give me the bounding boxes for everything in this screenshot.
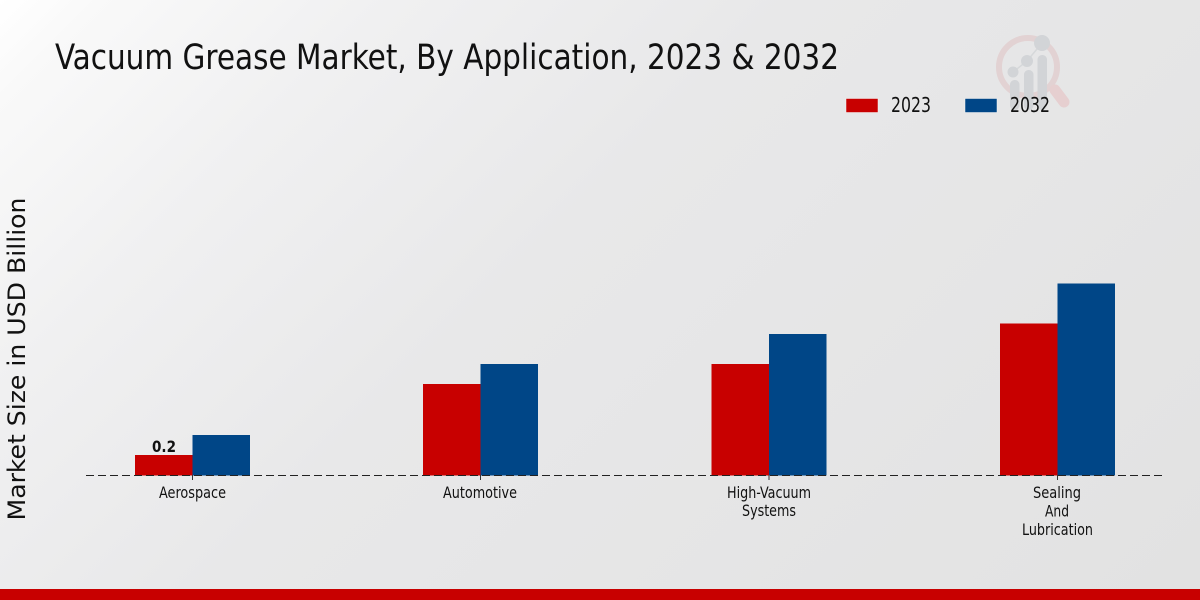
bars: Sealing And Lubrication [1000,284,1115,476]
value label: 0.2 [152,437,176,456]
legend item: 2032: 2032 [1010,93,1050,117]
bars: Automotive [423,364,538,476]
legend item: 2023 [846,93,931,117]
y-axis title: Market Size in USD Billion [3,198,31,520]
watermark logo [999,35,1064,110]
category label: High-Vacuum Systems: Systems [742,501,796,520]
bars: High-Vacuum Systems [712,334,826,476]
category label: Sealing And Lubrication [1022,483,1093,539]
legend item: 2023: 2023 [891,93,931,117]
title: Vacuum Grease Market, By Application, 2023 & 2032 [55,38,839,78]
category label: Sealing And Lubrication: Lubrication [1022,520,1093,539]
category label: High-Vacuum Systems: High-Vacuum [727,483,811,502]
bottom bar [0,589,1200,600]
legend [846,93,1050,117]
category label: Sealing And Lubrication: And [1045,502,1069,520]
category label: Automotive: Automotive [443,483,517,502]
category label: High-Vacuum Systems [727,483,811,520]
legend item: 2032 [965,93,1050,117]
category label: Aerospace: Aerospace [159,483,226,502]
bars: Aerospace [135,435,250,476]
bar chart [86,284,1164,539]
category label: Sealing And Lubrication: Sealing [1033,483,1081,502]
